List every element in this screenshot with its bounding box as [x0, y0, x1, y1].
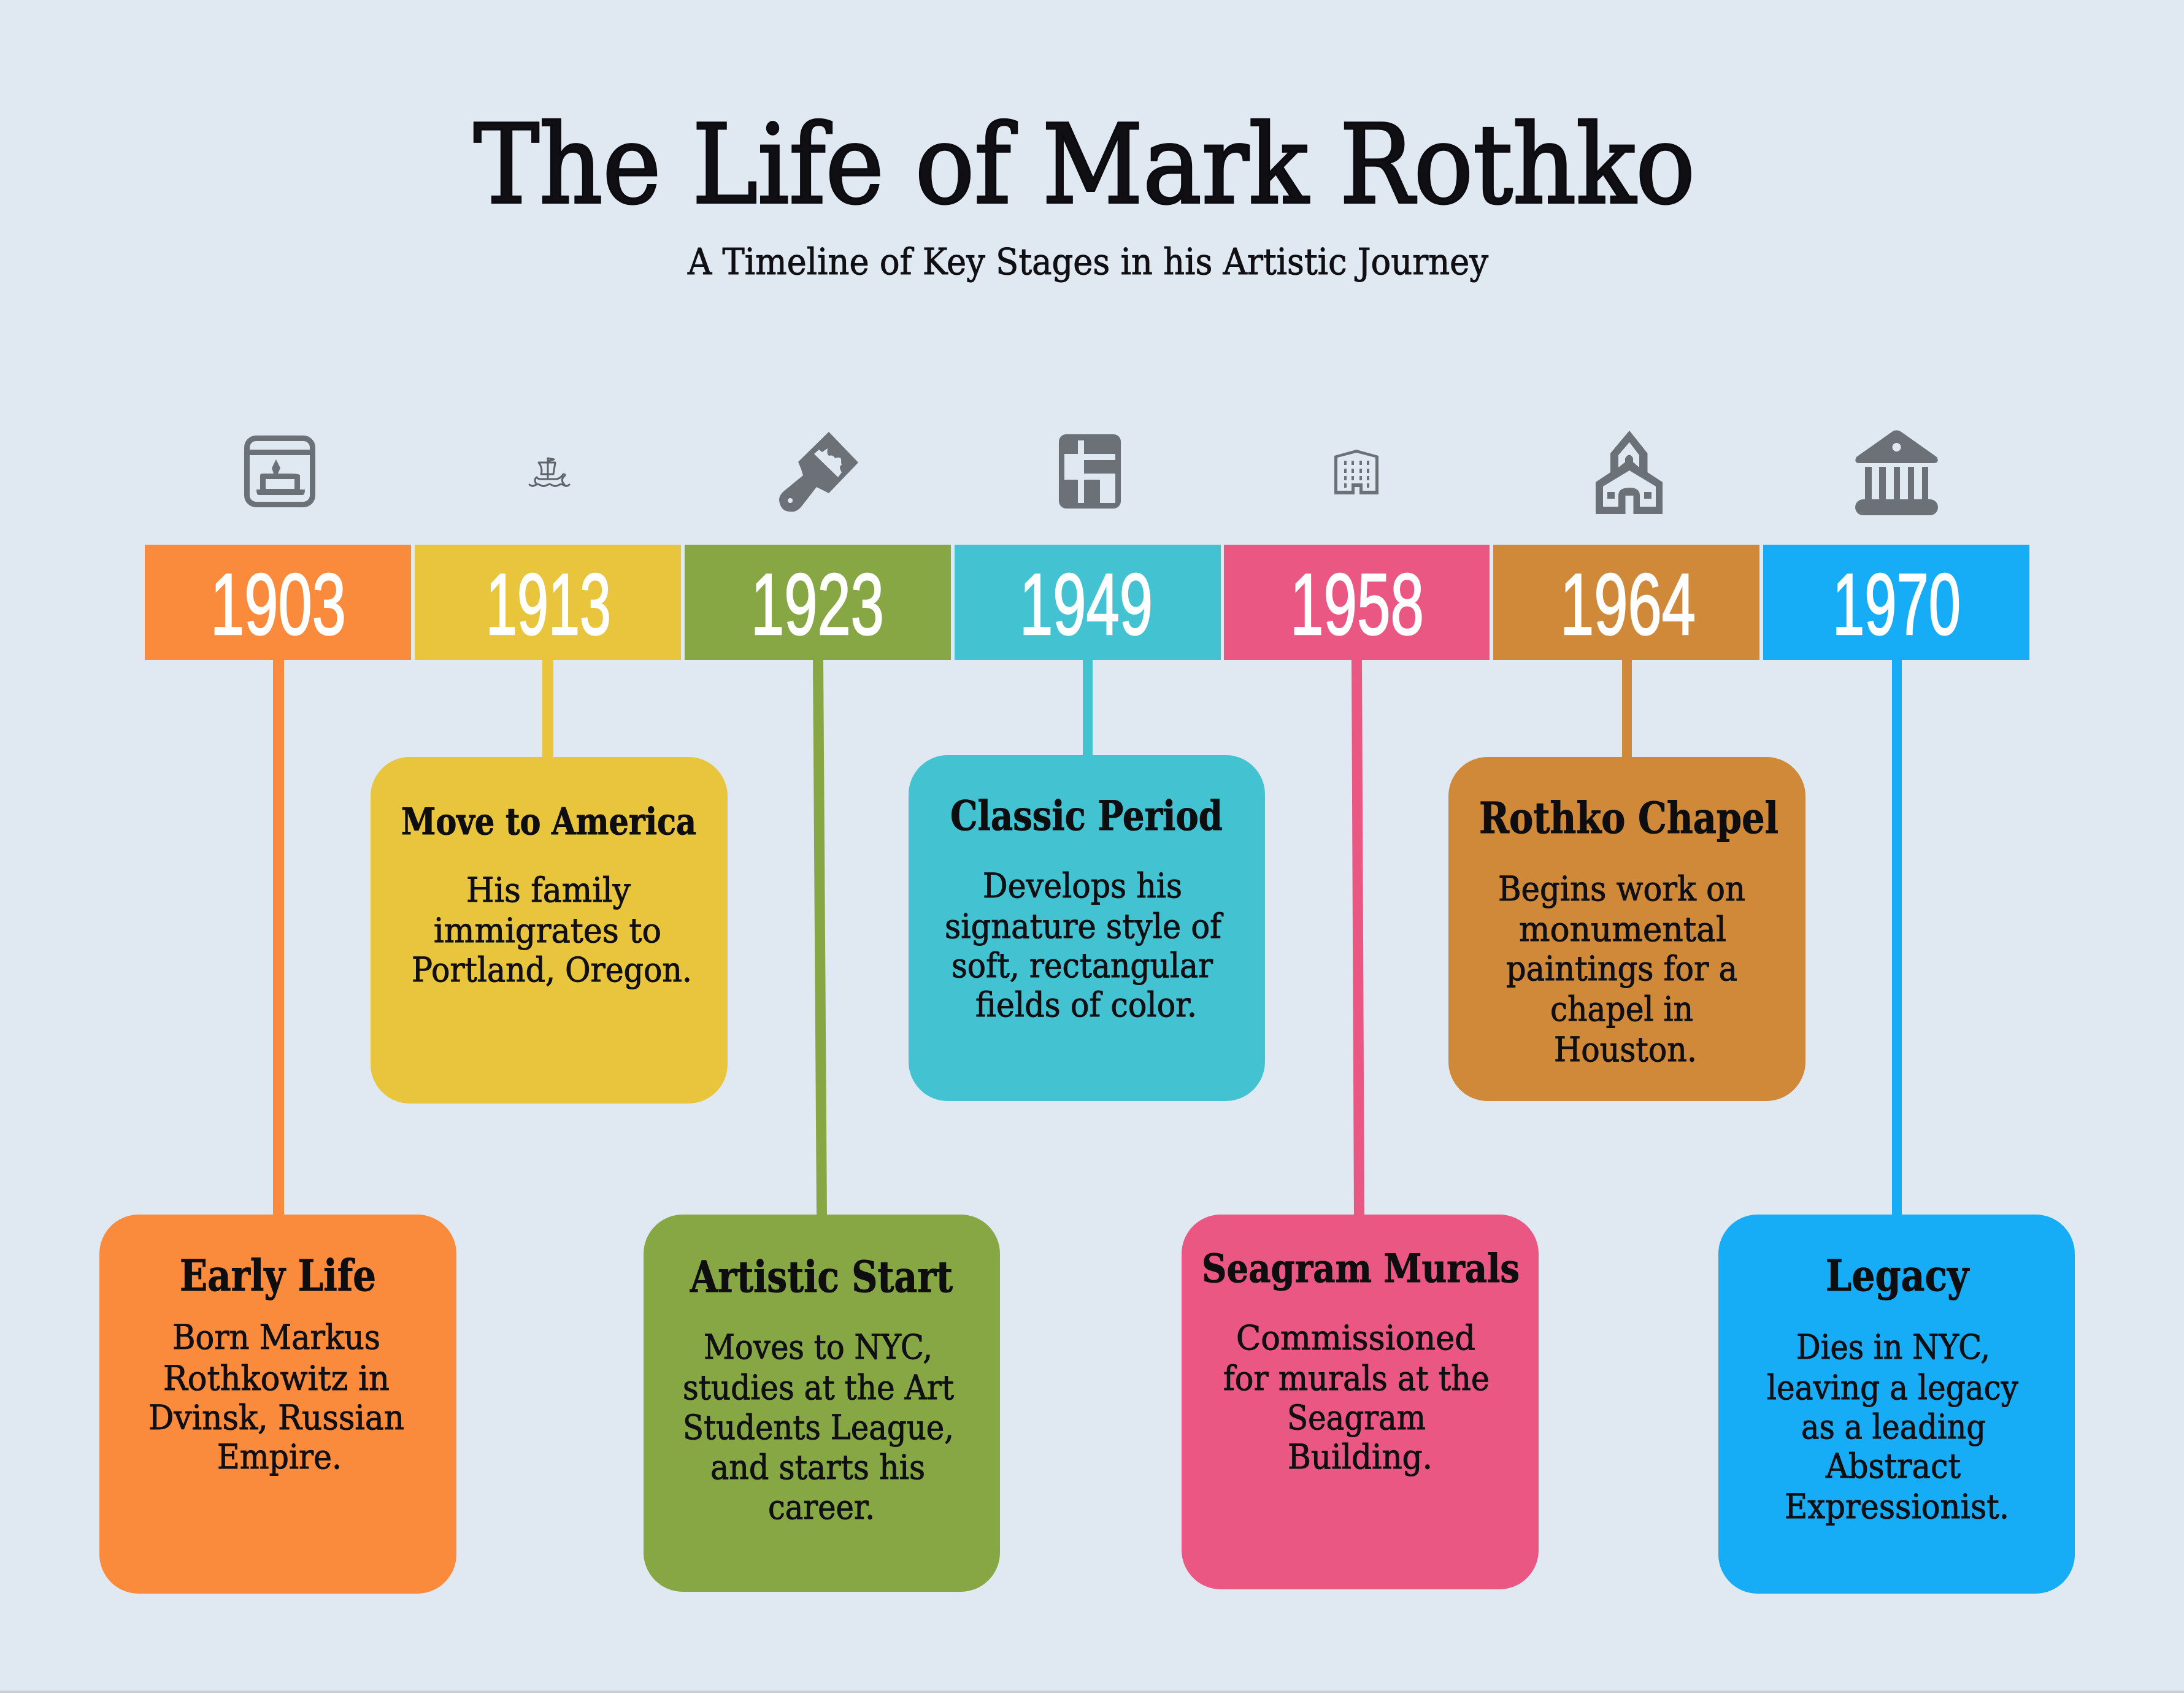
year: 1903: [145, 545, 411, 660]
year: 1903: 1903: [210, 556, 346, 653]
text: Early Life description: Born Markus: [172, 1318, 380, 1357]
text: Move to America description: His family: [466, 870, 631, 910]
text: Artistic Start description: [683, 1327, 954, 1527]
text: Classic Period description: soft, rectangular: [952, 946, 1213, 985]
text: Classic Period description: signature style of: [945, 907, 1223, 946]
text: Rothko Chapel description: Begins work on: [1498, 869, 1745, 908]
text: Legacy description: leaving a legacy: [1767, 1368, 2018, 1407]
text: Early Life description: Empire.: [217, 1437, 342, 1476]
text: Legacy description: as a leading: [1801, 1407, 1986, 1446]
heading: Legacy: Legacy: [1826, 1250, 1970, 1301]
text: Move to America description: immigrates to: [434, 911, 661, 950]
panel: Rothko Chapel: [1448, 757, 1805, 1101]
heading: Seagram Murals: Seagram Murals: [1202, 1246, 1520, 1292]
text: Classic Period description: [945, 866, 1223, 1024]
year: 1958: [1224, 545, 1490, 660]
connector lines: [273, 660, 1902, 1216]
title: The Life of Mark Rothko: [474, 101, 1695, 228]
year: 1970: [1763, 545, 2029, 660]
text: Artistic Start description: Moves to NYC,: [704, 1327, 932, 1367]
text: Rothko Chapel description: chapel in: [1550, 989, 1693, 1029]
panel: Early Life: [99, 1215, 456, 1594]
text: Artistic Start description: and starts his: [710, 1448, 925, 1487]
text: Classic Period description: fields of color.: [975, 985, 1197, 1024]
heading: Classic Period: Classic Period: [950, 792, 1223, 840]
text: Seagram Murals description: for murals at the: [1223, 1359, 1490, 1398]
text: Move to America description: [412, 870, 692, 989]
year: 1923: [685, 545, 951, 660]
year: 1949: 1949: [1020, 556, 1153, 653]
text: Artistic Start description: Students League,: [683, 1408, 954, 1447]
icon: paint brush: [779, 432, 858, 512]
heading: Early Life: Early Life: [180, 1250, 376, 1301]
text: Legacy description: Abstract: [1825, 1446, 1961, 1486]
year: 1964: [1493, 545, 1759, 660]
panel: Classic Period: [909, 755, 1265, 1101]
icon: office building: [1334, 450, 1378, 494]
text: Seagram Murals description: [1223, 1318, 1490, 1476]
year: 1970: 1970: [1832, 556, 1961, 653]
text: Legacy description: Expressionist.: [1785, 1487, 2009, 1526]
icon: birthday calendar: [245, 438, 314, 504]
text: Legacy description: [1767, 1327, 2018, 1526]
year: 1949: [955, 545, 1221, 660]
subtitle: A Timeline of Key Stages in his Artistic Journey: [687, 240, 1489, 283]
heading: Move to America: Move to America: [401, 800, 696, 843]
text: Classic Period description: Develops his: [983, 866, 1182, 905]
text: Rothko Chapel description: paintings for a: [1506, 949, 1737, 988]
year: 1964: 1964: [1560, 556, 1696, 653]
year: 1913: [415, 545, 681, 660]
year: 1958: 1958: [1290, 556, 1424, 653]
icon: colour field square: [1059, 434, 1121, 509]
year: 1913: 1913: [486, 556, 611, 653]
heading: Rothko Chapel: Rothko Chapel: [1479, 793, 1778, 843]
icon: chapel: [1596, 431, 1663, 514]
panel: Artistic Start: [644, 1215, 1000, 1592]
icon: museum columns: [1855, 431, 1938, 515]
text: Seagram Murals description: Seagram: [1287, 1398, 1426, 1437]
text: Seagram Murals description: Commissioned: [1236, 1318, 1475, 1357]
text: Artistic Start description: studies at the Art: [683, 1368, 954, 1407]
panel: Seagram Murals: [1182, 1215, 1539, 1589]
text: Early Life description: Rothkowitz in: [163, 1359, 390, 1398]
text: Rothko Chapel description: [1498, 869, 1745, 1069]
text: Move to America description: Portland, Oregon.: [412, 950, 692, 989]
icon: ship: [529, 458, 569, 486]
text: Rothko Chapel description: monumental: [1519, 910, 1726, 949]
text: Seagram Murals description: Building.: [1288, 1437, 1432, 1476]
year: 1923: 1923: [751, 556, 884, 653]
text: Legacy description: Dies in NYC,: [1796, 1327, 1990, 1367]
panel: Legacy: [1718, 1215, 2075, 1594]
text: Early Life description: Dvinsk, Russian: [148, 1398, 404, 1437]
heading: Artistic Start: Artistic Start: [690, 1251, 953, 1302]
panel: Move to America: [371, 757, 728, 1104]
text: Rothko Chapel description: Houston.: [1554, 1030, 1697, 1069]
text: Early Life description: [148, 1318, 404, 1476]
text: Artistic Start description: career.: [768, 1488, 875, 1527]
